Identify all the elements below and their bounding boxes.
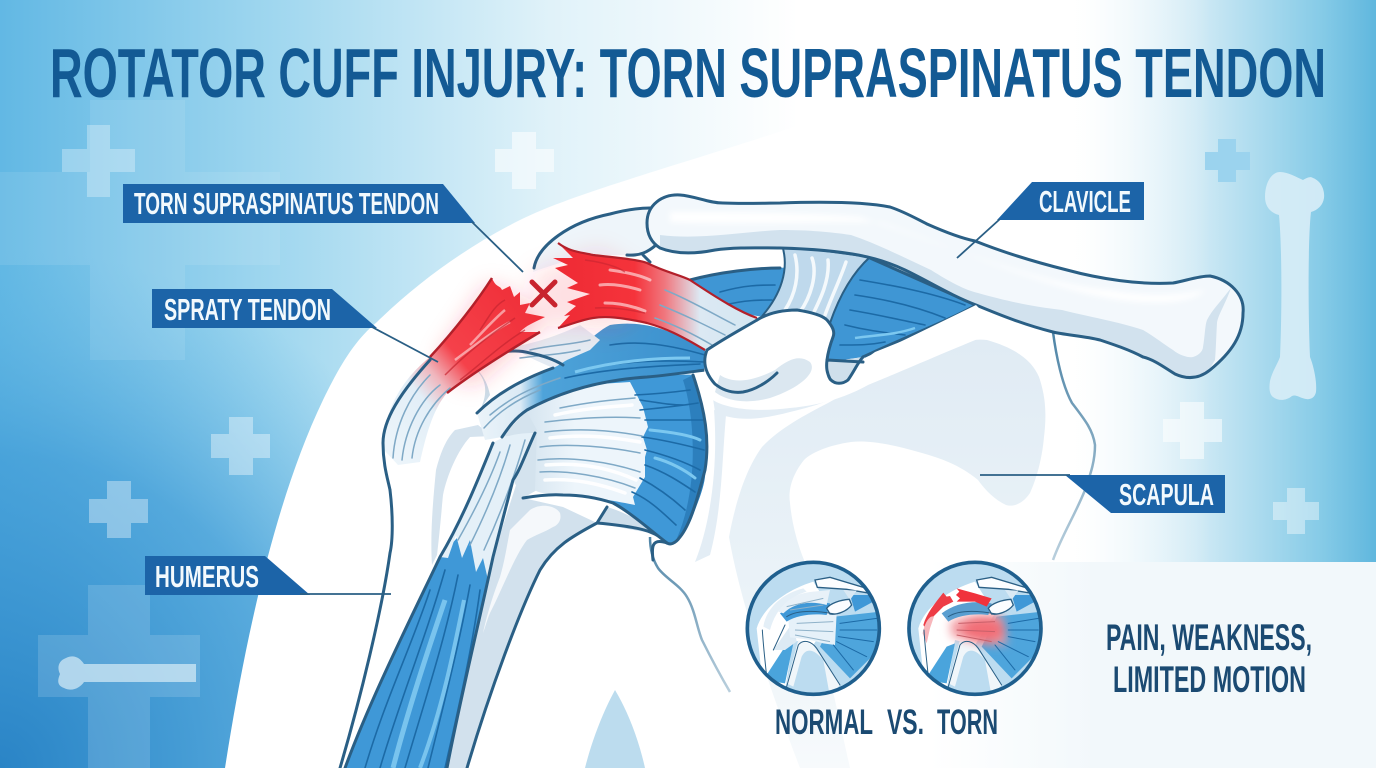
red X mark (532, 282, 555, 305)
label: humerus: HUMERUS (155, 559, 259, 594)
label: clavicle (957, 182, 1144, 258)
inset: torn shoulder (909, 562, 1042, 697)
arm muscle (345, 433, 535, 768)
label: torn supraspinatus tendon: TORN SUPRASPINATUS TENDON (134, 186, 439, 221)
label: scapula: SCAPULA (1119, 477, 1214, 512)
triangle of light between arm and torso (585, 690, 645, 768)
label: clavicle: CLAVICLE (1039, 184, 1131, 219)
label: spray tendon: SPRATY TENDON (164, 292, 331, 327)
label: spray tendon (152, 289, 438, 362)
coracoid process (704, 305, 1000, 410)
torn tendon, scapular side (553, 243, 757, 350)
normal vs torn caption: VS. (887, 703, 924, 742)
humerus outlines (340, 490, 667, 768)
label: humerus (145, 556, 391, 595)
scapula (650, 332, 1095, 768)
symptoms text (1106, 617, 1312, 700)
background bone right (1265, 172, 1324, 400)
label: scapula (980, 475, 1225, 513)
label: torn supraspinatus tendon (123, 184, 523, 272)
acromion (533, 208, 655, 272)
infraspinatus fan muscle (523, 375, 707, 560)
background plus signs (0, 100, 554, 768)
normal vs torn caption: NORMAL (775, 703, 873, 742)
acromion outline (534, 208, 656, 268)
lower right panel (930, 562, 1376, 768)
humerus (340, 353, 667, 768)
upper blue band (477, 324, 705, 440)
supraspinatus muscle behind clavicle (690, 258, 976, 362)
torn tendon, humeral side (383, 278, 545, 490)
normal vs torn caption (775, 703, 998, 742)
plus signs right (1163, 139, 1319, 534)
normal vs torn caption: TORN (937, 703, 998, 742)
inset: normal shoulder (747, 562, 880, 697)
background bone bottom left (58, 656, 196, 690)
ligament (763, 245, 870, 323)
red glow (440, 250, 660, 385)
clavicle (647, 195, 1243, 385)
